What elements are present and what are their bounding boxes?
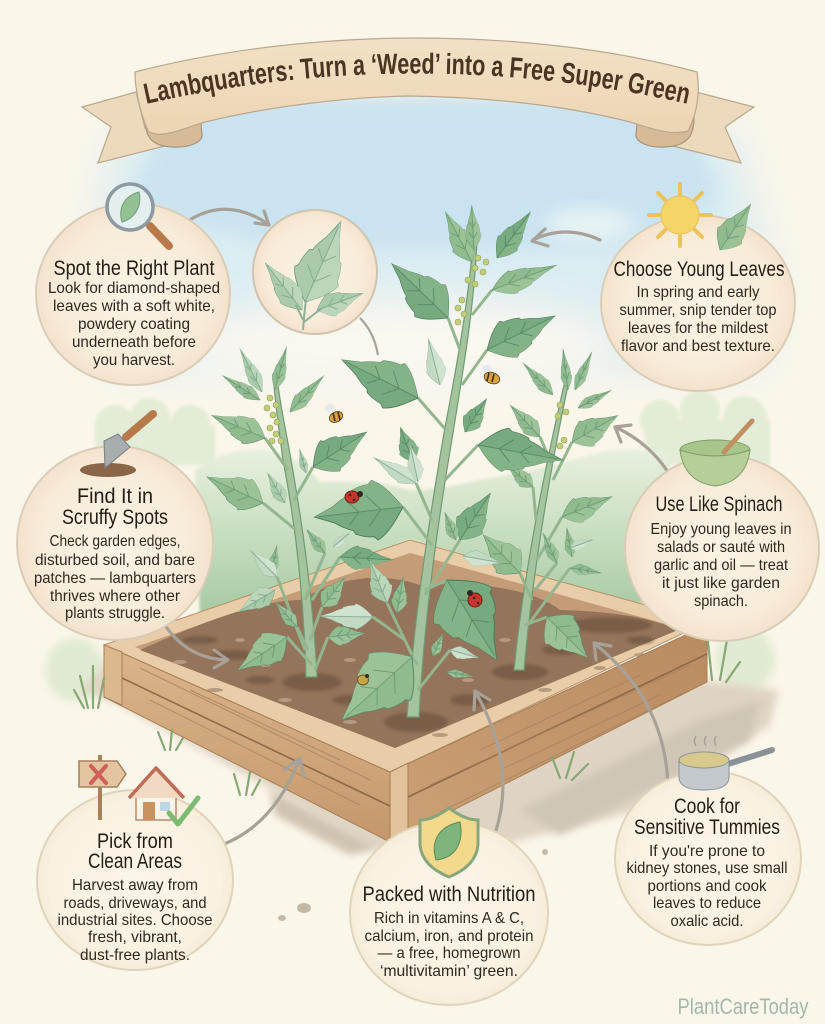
arrow: spot the right plant to leaf detail: [185, 209, 269, 225]
panel: spot the right plant: [36, 184, 230, 385]
body text: Check garden edges,: [50, 533, 180, 550]
panel: pick from clean areas: Clean Areas: [88, 850, 182, 873]
icon: saucepan with steam: [679, 736, 772, 790]
corner post: [390, 763, 408, 842]
body text: patches — lambquarters: [34, 570, 196, 587]
plant: center lambsquarters: [311, 205, 567, 743]
arrow: nutrition to soil: [474, 691, 503, 842]
body text: [650, 521, 792, 610]
left stem: [274, 385, 317, 677]
soil: [140, 578, 678, 748]
heading: Find It in: [77, 485, 153, 508]
body text: Harvest away from: [72, 877, 198, 894]
left roll: [145, 113, 202, 147]
body text: garlic and oil — treat: [654, 557, 789, 574]
ladybug on large left leaf: [345, 491, 363, 503]
panel: leaf detail circle: [253, 210, 377, 334]
body text: powdery coating: [78, 316, 190, 333]
center stem: [407, 240, 477, 717]
body text: [620, 284, 777, 355]
front left boards: [104, 645, 390, 842]
body text: leaves to reduce: [653, 895, 761, 912]
body text: [626, 843, 788, 930]
raised wooden garden bed: [104, 540, 707, 842]
watercolor sky: [85, 95, 775, 390]
line: leaf detail to plant: [360, 318, 378, 355]
body text: leaves for the mildest: [628, 320, 769, 337]
grass tufts: [74, 640, 740, 795]
body text: In spring and early: [636, 284, 760, 301]
arrow: cook to soil: [594, 643, 668, 785]
body text: underneath before: [72, 334, 196, 351]
body text: plants struggle.: [65, 605, 165, 622]
body text: oxalic acid.: [670, 913, 744, 930]
body text: thrives where other: [50, 588, 181, 605]
heading: Use Like Spinach: [656, 493, 782, 516]
plant: left lambsquarters: [200, 345, 394, 684]
icon: trowel in soil: [80, 414, 153, 477]
front right boards: [390, 625, 707, 842]
body text: leaves with a soft white,: [53, 298, 215, 315]
arrow: choose young leaves to plant: [532, 229, 600, 246]
body text: ‘multivitamin’ green.: [380, 963, 518, 980]
heading: Choose Young Leaves: [614, 258, 784, 281]
body text: summer, snip tender top: [620, 302, 777, 319]
heading: Packed with Nutrition: [362, 883, 536, 906]
panel: choose young leaves: [601, 184, 795, 391]
bed rim: [104, 540, 707, 772]
panel: pick from clean areas: [37, 755, 233, 970]
icon: three powdery leaves: [255, 212, 367, 330]
panel: cook for sensitive tummies: [615, 736, 801, 945]
icon: house: [129, 768, 184, 820]
panel: find it in scruffy spots: [17, 414, 213, 640]
heading: Pick from: [97, 830, 173, 853]
body text: spinach.: [694, 593, 748, 610]
right stem: [514, 385, 568, 670]
watercolor green hills: [45, 390, 775, 702]
inner wall: [135, 553, 680, 748]
panel: find it in scruffy spots: Scruffy Spots: [62, 506, 168, 529]
arrow: pick from clean areas to bed: [205, 758, 304, 850]
body text: fresh, vibrant,: [88, 929, 182, 946]
body text: Enjoy young leaves in: [650, 521, 792, 538]
panel: cook for sensitive tummies: Sensitive Tummies: [634, 816, 780, 839]
panel: packed with nutrition: [350, 808, 548, 1005]
arrow: use like spinach to plant: [615, 425, 668, 472]
body text: Rich in vitamins A & C,: [374, 910, 524, 927]
ladybug on large hanging leaf: [467, 590, 482, 607]
body text: disturbed soil, and bare: [35, 552, 195, 569]
body text: flavor and best texture.: [621, 338, 775, 355]
body text: industrial sites. Choose: [58, 912, 213, 929]
body text: salads or sauté with: [657, 539, 785, 556]
heading: Cook for: [674, 795, 740, 818]
icon: sun: [649, 184, 711, 246]
icon: magnifying glass with leaf: [107, 184, 169, 246]
icon: no-go signpost: [79, 755, 126, 820]
panel: use like spinach: [625, 421, 819, 641]
body text: Look for diamond-shaped: [48, 280, 220, 297]
body text: [58, 877, 213, 964]
left end post: [104, 645, 122, 705]
arrow: find it to soil: [163, 622, 228, 668]
body text: — a free, homegrown: [378, 945, 520, 962]
body text: roads, driveways, and: [64, 895, 206, 912]
left ribbon tail: [82, 92, 200, 163]
heading: Spot the Right Plant: [54, 257, 215, 280]
body text: [364, 910, 534, 980]
icon: green bowl and spoon: [680, 421, 752, 486]
plant: right lambsquarters: [471, 348, 625, 671]
body text: it just like garden: [662, 575, 780, 592]
bee right: [482, 365, 501, 386]
icon: green check mark: [169, 798, 198, 824]
title: Lambquarters: Turn a ‘Weed’ into a Free Super Green: [143, 52, 689, 104]
ground wash around the garden bed: [80, 660, 778, 921]
small yellow beetle: [358, 674, 369, 685]
ribbon body: [135, 38, 698, 134]
right roll: [636, 113, 694, 147]
banner ribbon: [80, 37, 756, 164]
body text: you harvest.: [93, 352, 175, 369]
icon: shield with leaf: [420, 808, 478, 877]
body text: dust-free plants.: [80, 947, 190, 964]
icon: young leaf: [708, 196, 763, 258]
body text: calcium, iron, and protein: [364, 928, 534, 945]
right ribbon tail: [636, 92, 754, 163]
body text: [48, 280, 220, 369]
bee left: [325, 404, 344, 424]
body text: [34, 533, 196, 622]
body text: If you're prone to: [649, 843, 765, 860]
body text: kidney stones, use small: [626, 860, 788, 877]
body text: portions and cook: [648, 878, 767, 895]
